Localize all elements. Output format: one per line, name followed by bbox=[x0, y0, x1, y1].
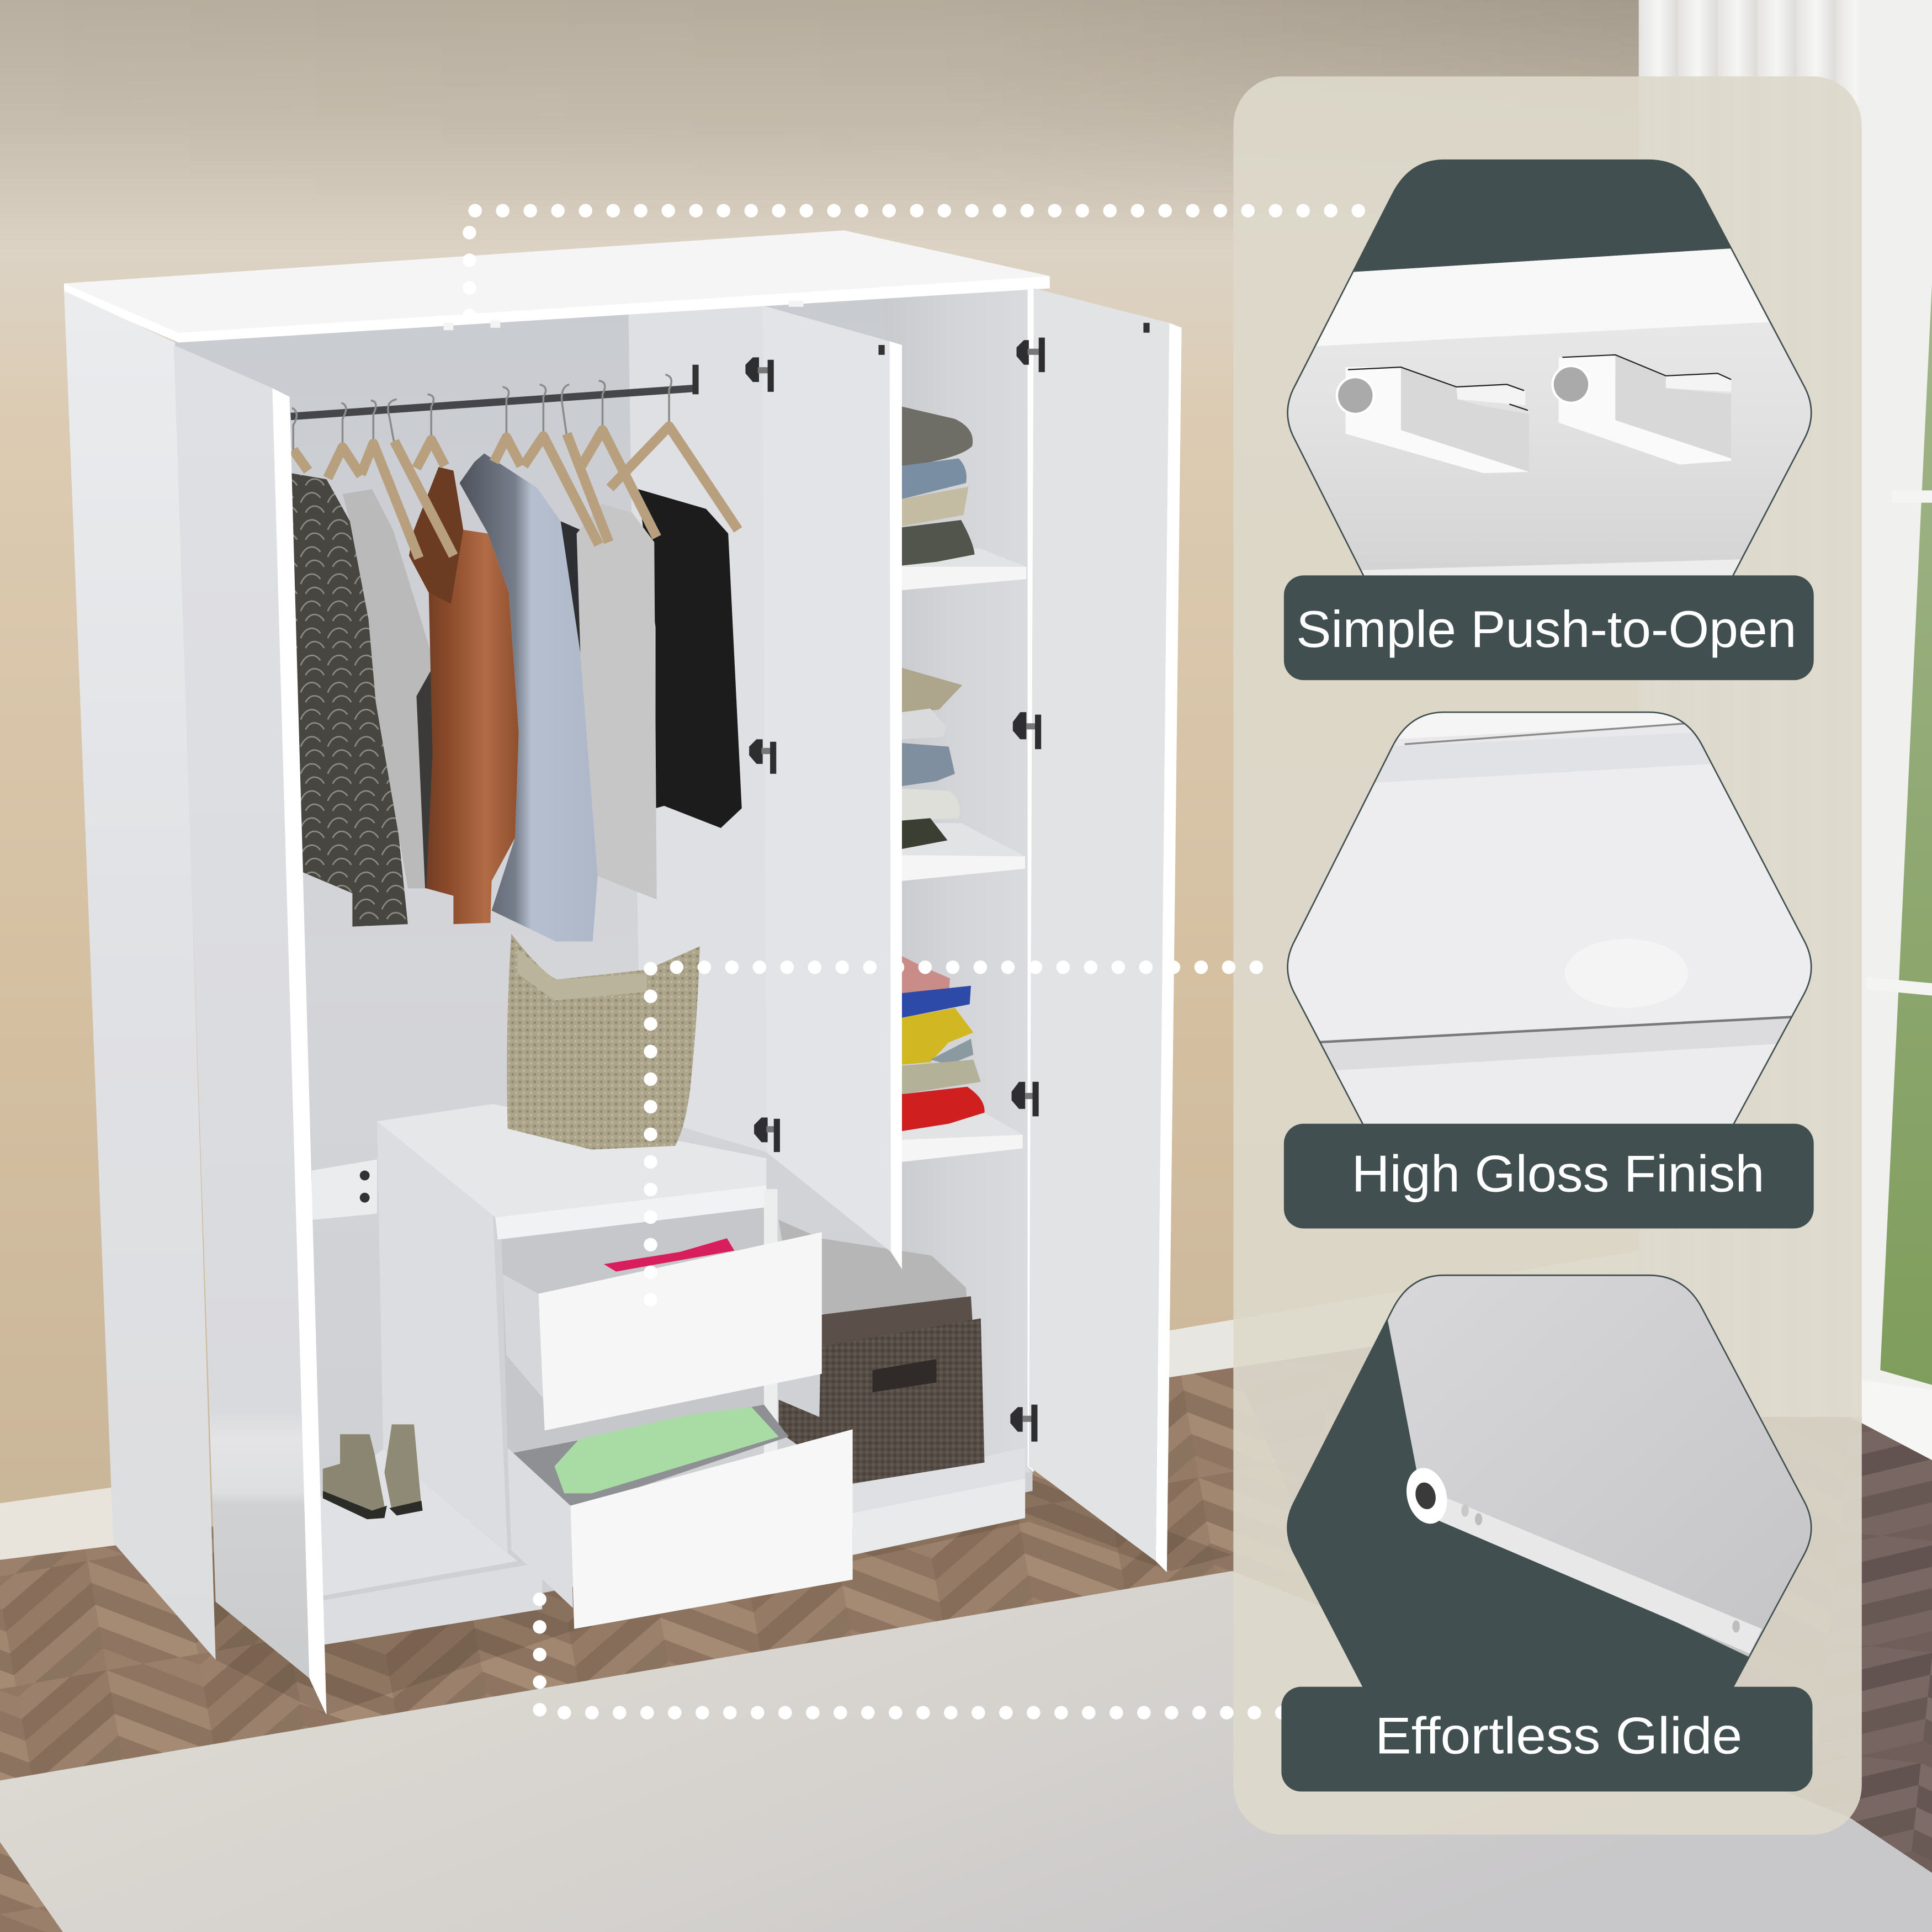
upper drawer side bbox=[503, 1274, 543, 1398]
drawer unit bbox=[377, 1104, 853, 1629]
handbag bbox=[507, 934, 700, 1150]
label: Simple Push-to-Open: Simple Push-to-Open bbox=[1296, 600, 1796, 658]
left door bbox=[174, 345, 327, 1715]
base right bbox=[853, 1479, 1025, 1555]
middle door bbox=[763, 306, 902, 1269]
yellow garment bbox=[293, 580, 313, 748]
dotted connector: glide bbox=[540, 1599, 1288, 1713]
push latch left bbox=[1336, 367, 1529, 473]
right door bbox=[1028, 286, 1182, 1572]
floor bbox=[0, 1306, 1932, 1932]
unit top bbox=[377, 1104, 766, 1217]
push latch right bbox=[1551, 355, 1731, 465]
baseboards bbox=[0, 1251, 1639, 1560]
shelf 1 bbox=[902, 548, 1026, 590]
floor shadow bbox=[113, 1479, 1232, 1715]
lower mullion bbox=[1867, 977, 1932, 996]
lower drawer front bbox=[570, 1429, 853, 1629]
left compartment partition bbox=[628, 303, 766, 1152]
mounting bracket bbox=[312, 1159, 377, 1220]
grey shirt bbox=[343, 489, 435, 888]
hexagon: drawer glide detail bbox=[1269, 1269, 1824, 1700]
folded clothes stack 2 bbox=[902, 668, 962, 849]
left side panel bbox=[64, 291, 216, 1660]
grey shirt right bbox=[577, 504, 657, 899]
leather collar bbox=[409, 467, 463, 604]
unit side bbox=[377, 1121, 508, 1552]
interior back panel bbox=[172, 286, 1033, 1639]
blue shirt bbox=[460, 453, 598, 941]
folded clothes stack 3 bbox=[902, 956, 985, 1131]
rug bbox=[0, 1571, 1932, 1932]
push latches underside bbox=[444, 301, 803, 330]
hexagon: high gloss detail bbox=[1269, 702, 1824, 1134]
window frame and curtain bbox=[1639, 0, 1932, 1460]
hangers bbox=[292, 375, 738, 558]
hanging rod bbox=[291, 365, 699, 416]
label: Effortless Glide: Effortless Glide bbox=[1375, 1706, 1742, 1764]
blankets bbox=[779, 1220, 967, 1316]
wardrobe bbox=[64, 230, 1182, 1715]
garment shadow bbox=[416, 665, 434, 888]
shelf 3 bbox=[902, 1113, 1023, 1162]
patterned jacket bbox=[291, 473, 408, 927]
lower drawer interior bbox=[508, 1405, 789, 1509]
hexagon: push-to-open detail bbox=[1269, 154, 1824, 591]
label: High Gloss Finish: High Gloss Finish bbox=[1352, 1144, 1764, 1202]
upper mullion bbox=[1891, 490, 1932, 503]
bottom shelf right bbox=[853, 1448, 1025, 1513]
drawer roller bbox=[1406, 1468, 1447, 1524]
dotted connector: push to open bbox=[469, 211, 1370, 315]
lower drawer side bbox=[508, 1448, 573, 1608]
green clothes bbox=[554, 1407, 779, 1493]
unit opening bbox=[501, 1208, 789, 1454]
upper drawer front bbox=[538, 1232, 822, 1431]
unit right rail bbox=[764, 1189, 777, 1485]
door hinges bbox=[745, 338, 1045, 1442]
right compartment back bbox=[885, 286, 1030, 1479]
shelf 2 bbox=[902, 823, 1025, 881]
label: Effortless Glide bbox=[1281, 1687, 1812, 1792]
feature panel bbox=[1233, 76, 1862, 1835]
dark inner shadow bbox=[561, 518, 604, 653]
boots bbox=[323, 1424, 423, 1519]
top board bbox=[64, 230, 1050, 343]
label: High Gloss Finish bbox=[1284, 1124, 1814, 1228]
folded clothes stack 1 bbox=[902, 407, 975, 566]
base left bbox=[314, 1562, 542, 1645]
bottom shelf left bbox=[314, 1449, 518, 1596]
dotted connector: high gloss bbox=[651, 967, 1269, 1300]
unit front band bbox=[495, 1185, 766, 1240]
storage basket bbox=[779, 1296, 984, 1484]
black garment bbox=[638, 489, 742, 828]
window sill bbox=[1862, 1380, 1932, 1460]
leather jacket bbox=[409, 467, 519, 924]
label: Simple Push-to-Open bbox=[1284, 575, 1814, 680]
garden view bbox=[1880, 283, 1932, 1385]
pink clothes bbox=[604, 1238, 734, 1272]
